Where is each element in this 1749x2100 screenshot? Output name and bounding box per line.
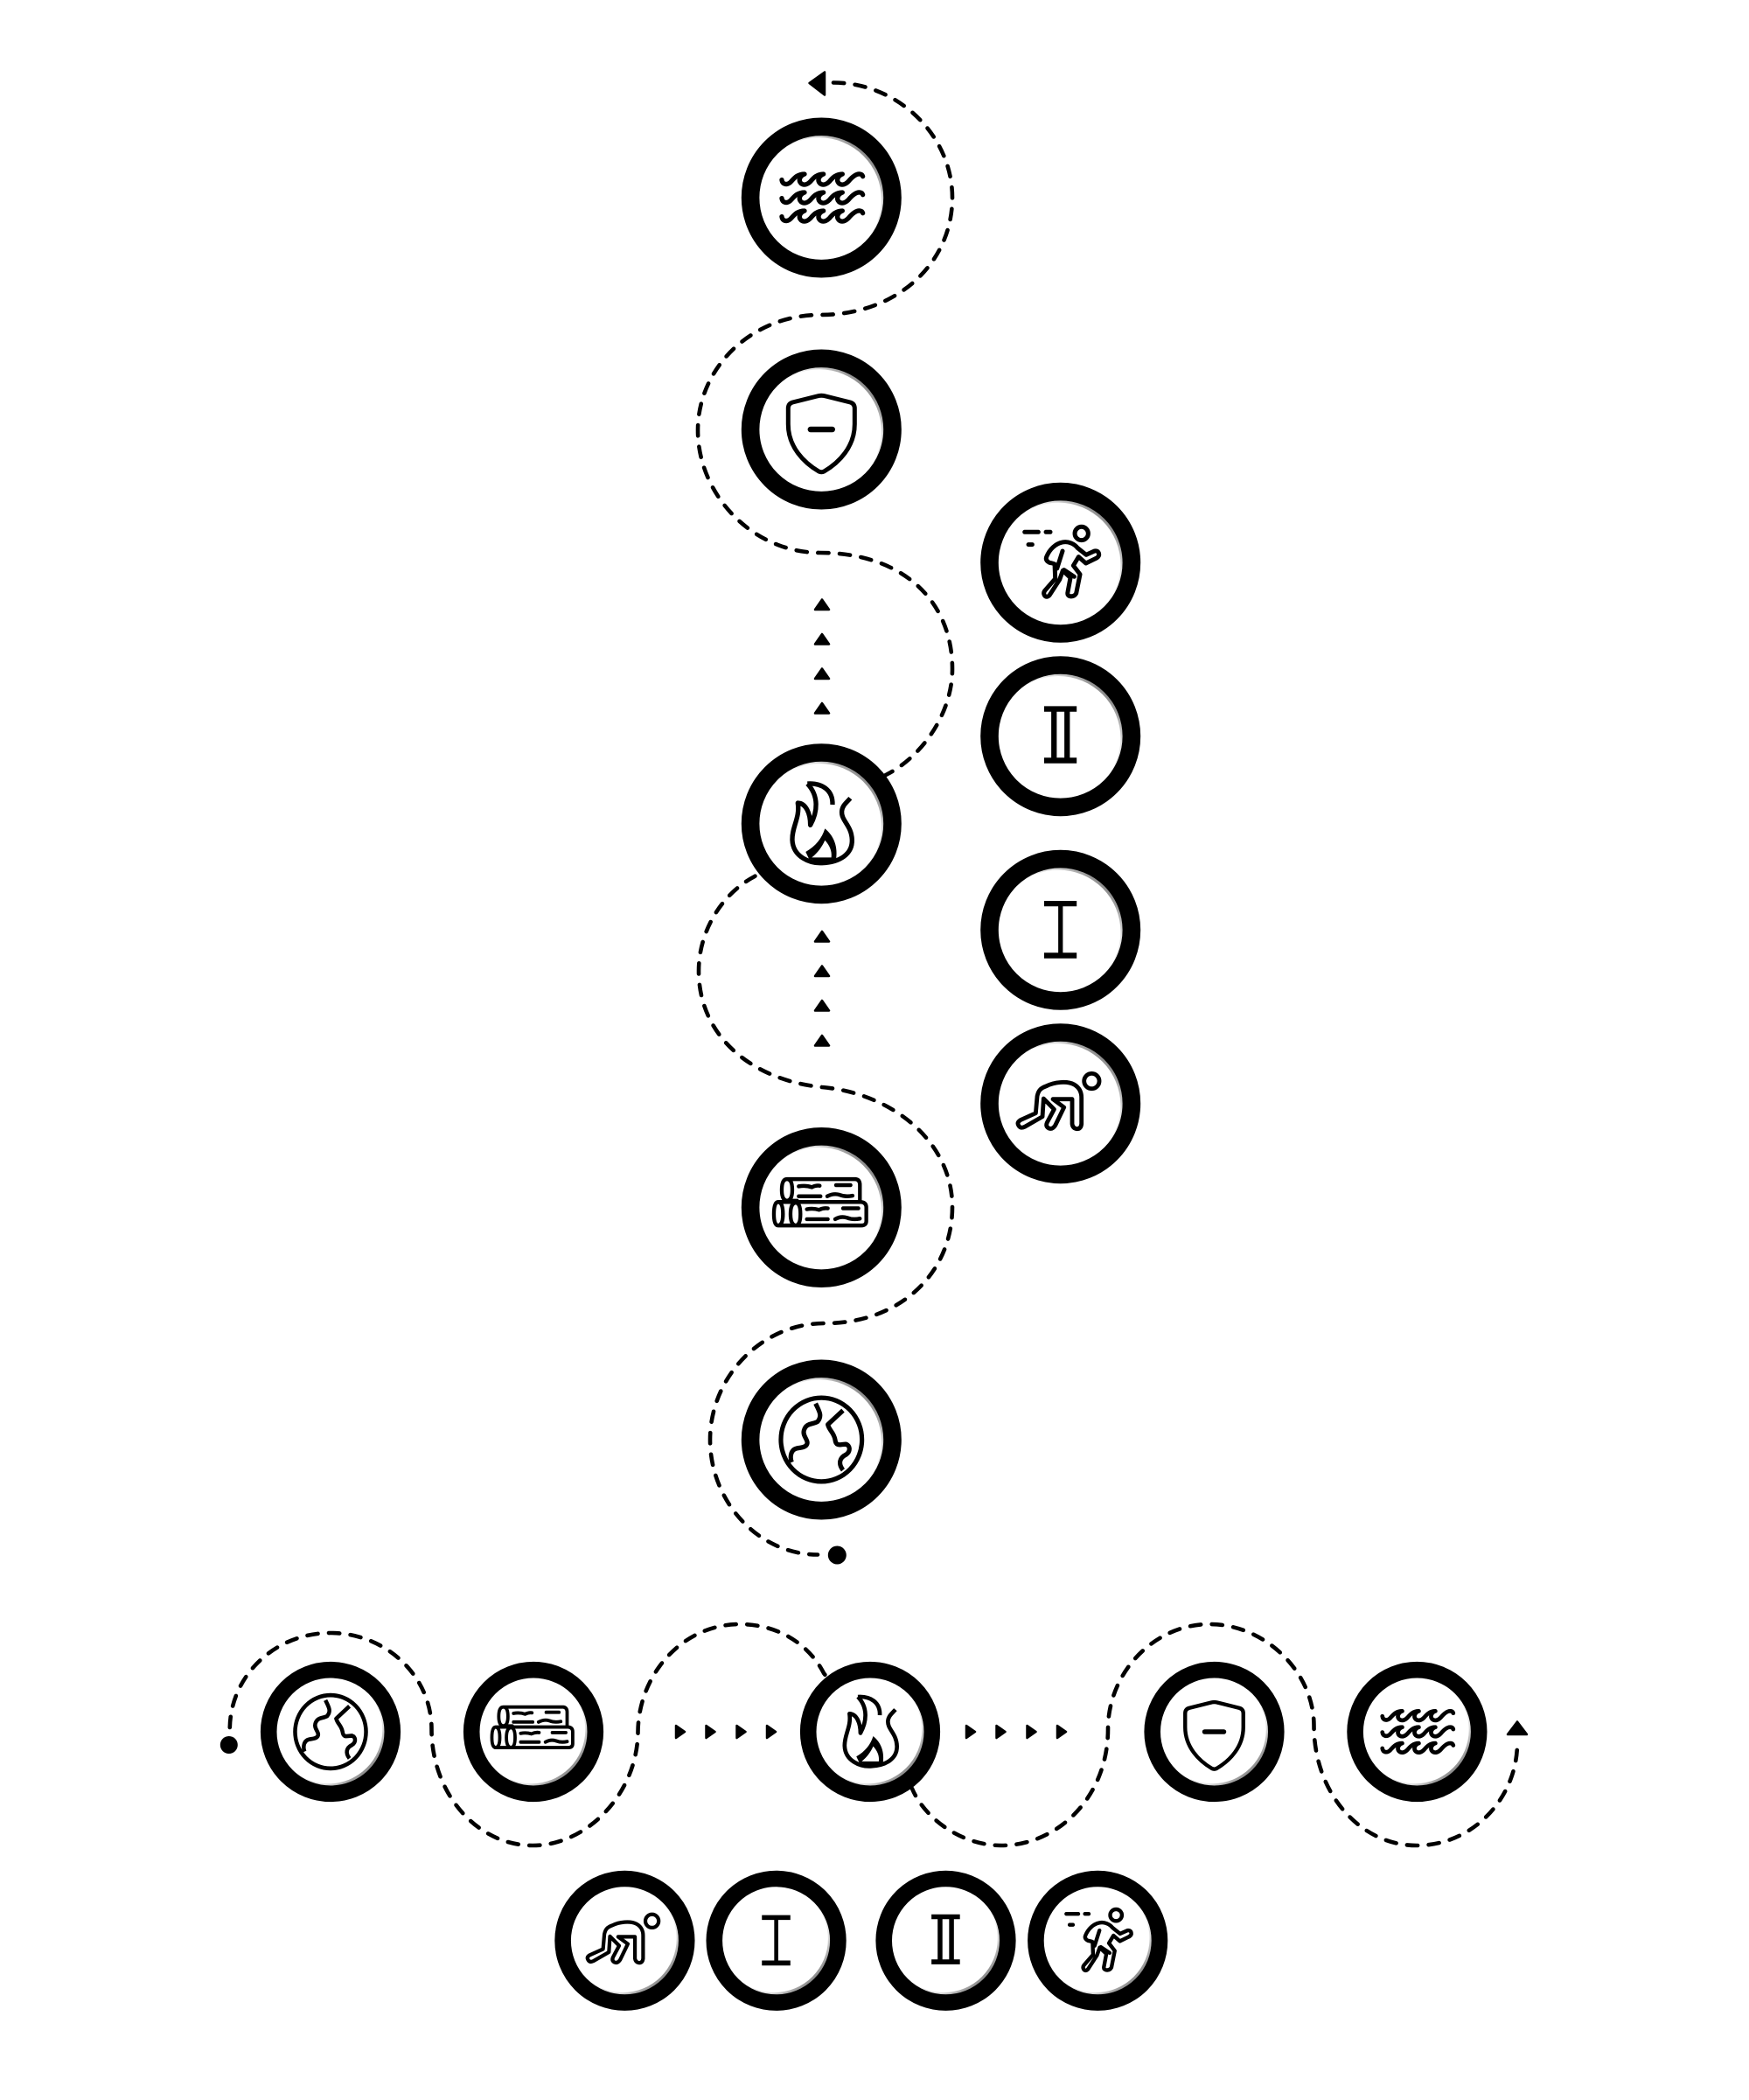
arrowhead: vertical path end — [810, 72, 825, 94]
lower upward triangle arrows — [815, 931, 829, 1046]
badge: numeral II (bottom row) — [884, 1879, 1007, 2003]
right rightward triangle arrows — [966, 1726, 1066, 1738]
badge: numeral I (right column): I — [1054, 885, 1068, 973]
vertical dashed path — [698, 82, 952, 1555]
badge: numeral I (bottom row): I — [770, 1901, 782, 1978]
badge: logs (vertical) — [750, 1136, 892, 1279]
badge: numeral II (right column): II — [1046, 690, 1076, 778]
badge: logs (horizontal) — [471, 1670, 596, 1794]
badge: shield (vertical) — [750, 359, 892, 500]
start dot: vertical path — [828, 1546, 847, 1564]
badge: runner (bottom row) — [1035, 1879, 1160, 2003]
badge: globe (horizontal) — [268, 1670, 393, 1794]
badge: shield (horizontal) — [1153, 1670, 1276, 1794]
badge: numeral I (right column) — [990, 859, 1132, 1001]
badge: crawler (bottom row) — [563, 1879, 686, 2003]
badge: waves (vertical) — [750, 127, 892, 269]
upper upward triangle arrows — [815, 600, 829, 714]
badge: crawler (right column) — [990, 1032, 1132, 1175]
badge: fire (horizontal) — [808, 1670, 932, 1794]
badge: numeral II (right column) — [990, 665, 1132, 807]
badge: runner (right column) — [990, 492, 1132, 633]
horizontal dashed path — [230, 1624, 1517, 1845]
badge: numeral II (bottom row): II — [933, 1901, 958, 1978]
start dot: horizontal path — [220, 1736, 238, 1754]
left rightward triangle arrows — [676, 1726, 776, 1738]
badge: numeral I (bottom row) — [714, 1879, 838, 2003]
badge: globe (vertical) — [750, 1369, 892, 1510]
badge: fire (vertical) — [750, 752, 892, 895]
badge: waves (horizontal) — [1355, 1670, 1479, 1794]
arrowhead: horizontal path end — [1508, 1721, 1527, 1734]
